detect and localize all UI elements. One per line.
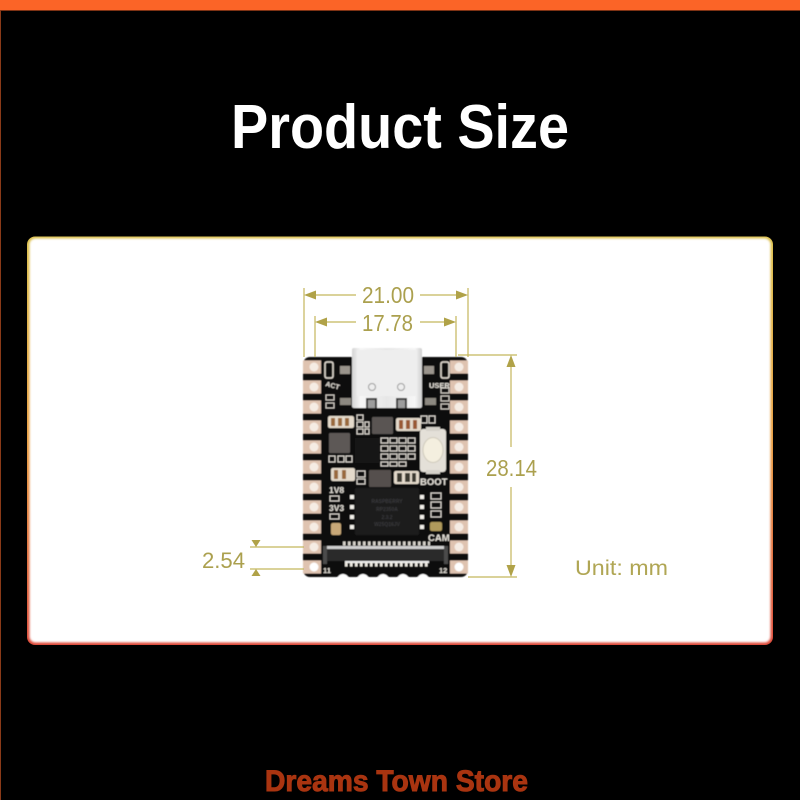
panel: product dimensions [27, 236, 773, 645]
right castellated pads [454, 360, 464, 576]
title: Product Size [231, 93, 569, 162]
top orange bar [0, 0, 800, 10]
silkscreen labels: BOOT [420, 477, 448, 488]
left castellated pads [310, 360, 318, 576]
dimension: pin pitch 2.54 [202, 540, 304, 576]
dimension: pin spacing width 17.78 [315, 310, 456, 357]
silkscreen labels [323, 381, 450, 575]
dimension: pin spacing width 17.78: 17.78 [362, 310, 413, 336]
unit note: Unit: mm [575, 557, 668, 580]
white silkscreen resistor grid [329, 415, 441, 519]
USB-C connector [352, 348, 422, 408]
chips: 2.3.2 [381, 515, 393, 521]
silkscreen labels: 11 [323, 566, 331, 575]
silkscreen labels: 12 [439, 566, 447, 575]
PCB body [303, 357, 468, 577]
dimension: height 28.14: 28.14 [486, 455, 537, 481]
silkscreen labels: 1V8 [329, 485, 344, 495]
passive component groups [328, 416, 442, 535]
silkscreen labels: CAM [428, 533, 450, 544]
chips: W25Q16JV [374, 522, 401, 528]
silkscreen labels: ACT [324, 381, 341, 392]
silkscreen labels: 3V3 [329, 503, 344, 513]
dimension: overall width 21.00: 21.00 [362, 282, 414, 308]
dimension: height 28.14 [458, 355, 537, 577]
silkscreen labels: USER [429, 381, 450, 390]
chips [329, 417, 424, 535]
bottom edge notches [337, 574, 429, 586]
camera FPC connector [323, 544, 448, 564]
chips: RP2350A [376, 507, 398, 513]
product board [303, 348, 468, 586]
dimension: pin pitch 2.54: 2.54 [202, 548, 245, 573]
top small components [325, 362, 449, 409]
left edge line [0, 10, 1, 800]
chips: RASPBERRY [371, 499, 403, 505]
dimension: overall width 21.00 [304, 282, 468, 357]
footer store name: Dreams Town Store [265, 765, 528, 798]
BOOT button [420, 427, 446, 474]
